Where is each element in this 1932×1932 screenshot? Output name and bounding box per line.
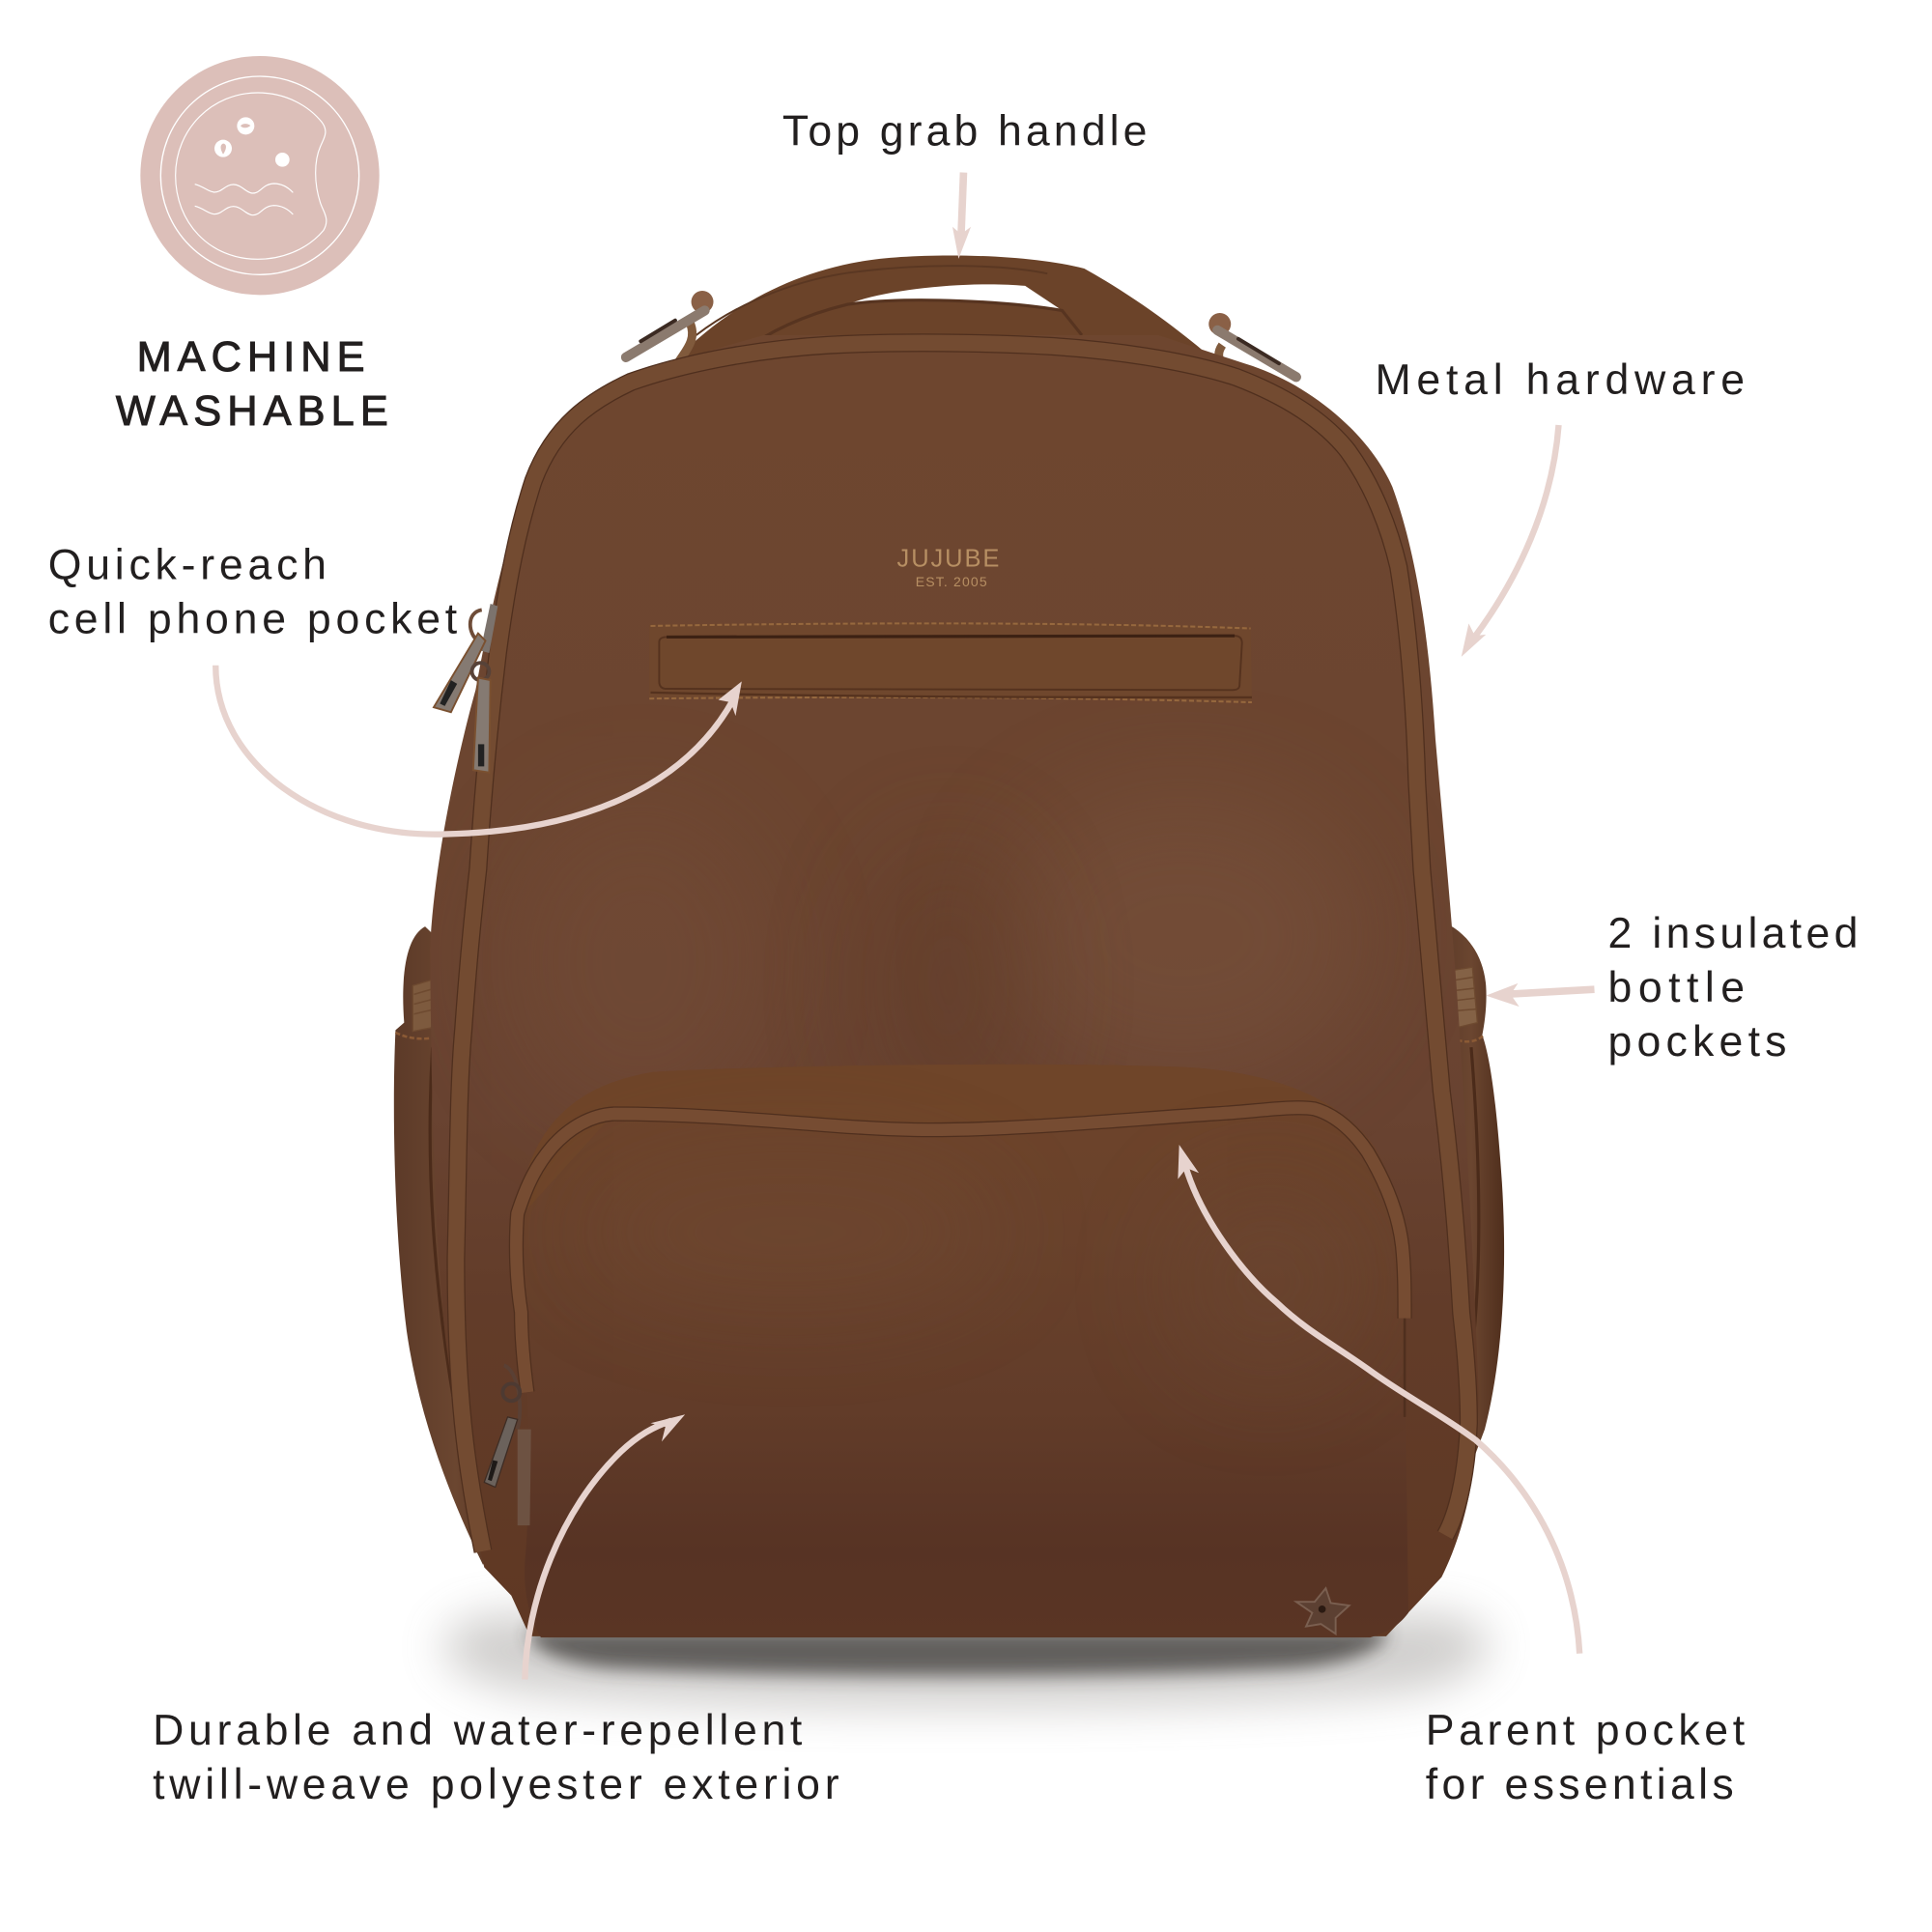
icon: washing machine drum — [140, 56, 380, 295]
label: durable exterior: twill-weave polyester exterior — [153, 1761, 839, 1808]
pocket zipper trim — [516, 1108, 1405, 1417]
arrow: parent pocket — [1178, 1145, 1579, 1654]
label: parent pocket: Parent pocket — [1426, 1707, 1746, 1754]
label: durable exterior — [153, 1707, 839, 1808]
logo — [897, 546, 999, 589]
backpack illustration — [394, 255, 1504, 1707]
label: parent pocket: for essentials — [1426, 1761, 1734, 1808]
label: durable exterior: Durable and water-repellent — [153, 1707, 803, 1754]
arrow: top grab handle — [952, 173, 971, 259]
right side pocket — [1439, 921, 1504, 1485]
label: 2 insulated bottle pockets — [1608, 910, 1858, 1065]
label: top grab handle: Top grab handle — [782, 108, 1148, 156]
machine washable badge — [116, 56, 388, 435]
logo: EST. 2005 — [916, 574, 987, 589]
label: quick-reach cell phone pocket: cell phone pocket — [48, 596, 458, 643]
top grab handle — [675, 255, 1213, 370]
metal ring left — [626, 291, 714, 363]
label: parent pocket — [1426, 1707, 1746, 1808]
heading: machine washable: WASHABLE — [116, 388, 388, 435]
left side pocket — [394, 926, 518, 1565]
label: 2 insulated bottle pockets: pockets — [1608, 1018, 1786, 1065]
label: 2 insulated bottle pockets: bottle — [1608, 964, 1745, 1011]
logo: JUJUBE — [897, 546, 999, 573]
main body — [430, 335, 1479, 1636]
zipper pulls lower left — [484, 1365, 531, 1525]
star charm — [1296, 1588, 1350, 1634]
arrow: durable exterior — [525, 1414, 685, 1680]
label: 2 insulated bottle pockets: 2 insulated — [1608, 910, 1858, 957]
label: quick-reach cell phone pocket: Quick-reach — [48, 541, 327, 588]
arrow: bottle pockets — [1486, 983, 1595, 1007]
heading: machine washable: MACHINE — [137, 334, 365, 381]
arrow: metal hardware — [1462, 425, 1559, 657]
zipper pulls upper left — [434, 604, 497, 773]
parent front pocket — [516, 1060, 1417, 1637]
label: quick-reach cell phone pocket — [48, 541, 458, 643]
heading: machine washable — [116, 334, 388, 435]
label: metal hardware: Metal hardware — [1375, 356, 1745, 404]
metal ring right — [1208, 313, 1296, 377]
zipper trim around top — [456, 343, 1468, 1551]
arrow: cell phone pocket — [215, 666, 742, 835]
cell phone pocket — [649, 623, 1252, 702]
ground shadow — [442, 1614, 1490, 1707]
